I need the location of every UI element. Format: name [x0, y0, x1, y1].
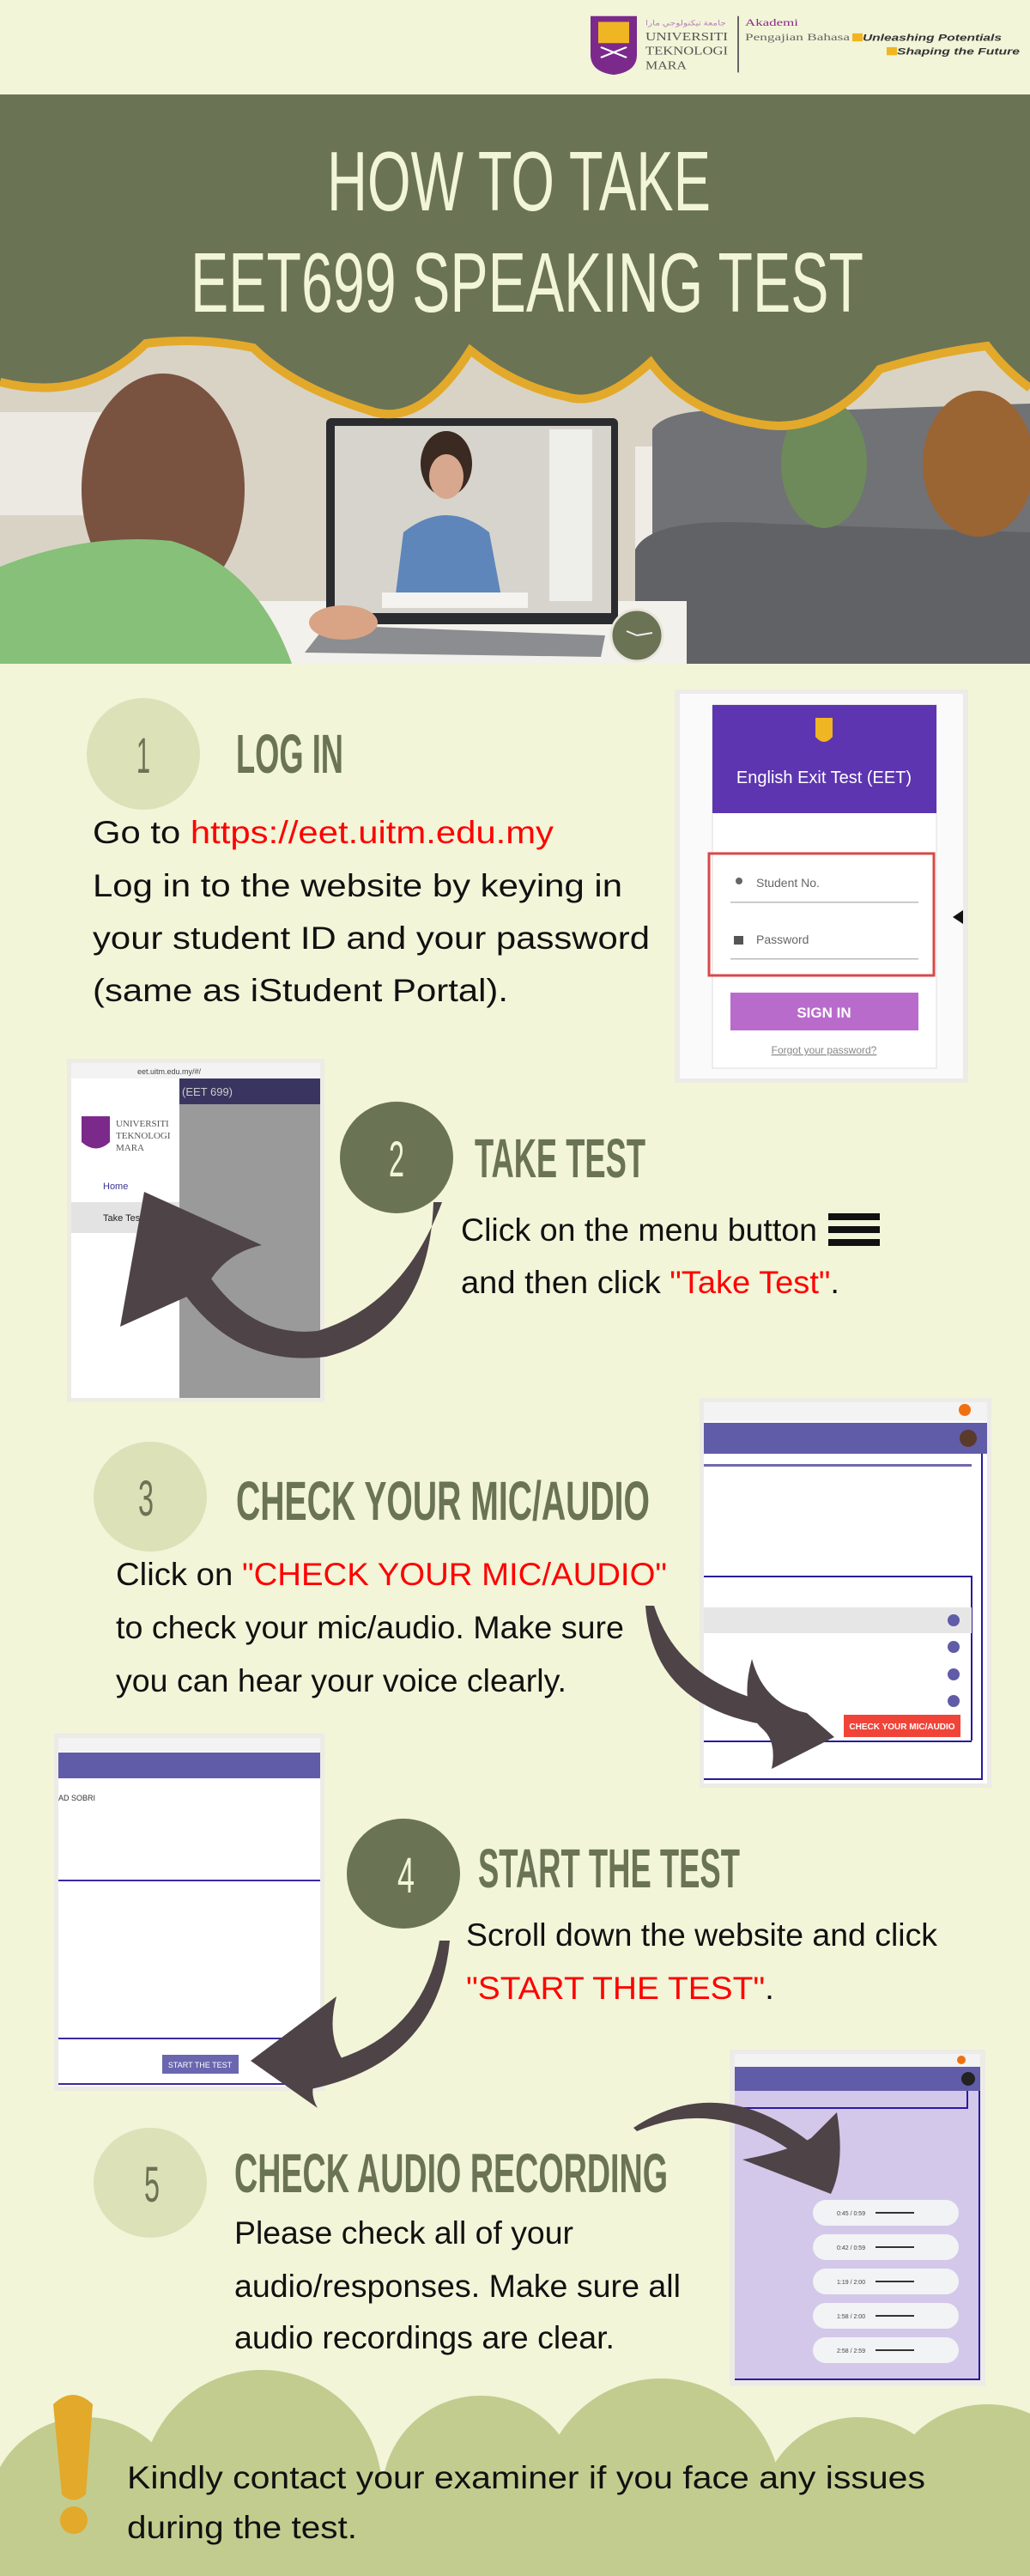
heading: log in: LOG IN — [236, 723, 343, 785]
logo header: Shaping the Future — [897, 46, 1020, 57]
note text: during the test. — [127, 2510, 357, 2545]
logo header: Pengajian Bahasa — [745, 32, 851, 43]
circle 1 — [87, 698, 200, 810]
arrow 2 — [120, 1192, 442, 1358]
arrow 4 — [251, 1941, 450, 2108]
menu screenshot: Take Test — [103, 1213, 142, 1224]
mic screenshot — [700, 1398, 991, 1788]
icon: exclamation — [53, 2395, 93, 2534]
heading: start the test: START THE TEST — [478, 1838, 740, 1899]
step 3 — [94, 1398, 991, 1788]
text 1 — [93, 815, 650, 1008]
text 4 — [466, 1917, 937, 2006]
login screenshot: Forgot your password? — [772, 1044, 877, 1056]
circle 5 — [94, 2128, 207, 2238]
logo header: UNIVERSITI — [645, 30, 728, 43]
start test screenshot — [54, 1734, 324, 2091]
heading: check your mic: CHECK YOUR MIC/AUDIO — [236, 1470, 650, 1532]
menu screenshot: MARA — [116, 1143, 144, 1153]
arrow 5 — [633, 2103, 840, 2194]
start test screenshot: START THE TEST — [168, 2061, 233, 2069]
logo header: Akademi — [745, 17, 798, 28]
menu screenshot — [67, 1059, 324, 1402]
step 1 — [87, 690, 968, 1083]
logo header: TEKNOLOGI — [645, 45, 728, 58]
logo header — [591, 16, 1020, 75]
menu screenshot: eet.uitm.edu.my/#/ — [137, 1067, 202, 1076]
text 5: audio/responses. Make sure all — [234, 2269, 681, 2304]
text 5: audio recordings are clear. — [234, 2320, 615, 2355]
menu screenshot: TEKNOLOGI — [116, 1131, 171, 1141]
audio screenshot: 2:58 / 2:59 — [837, 2348, 865, 2354]
login screenshot: Student No. — [756, 876, 820, 890]
text 4: Scroll down the website and click — [466, 1917, 937, 1953]
login screenshot — [675, 690, 968, 1083]
menu screenshot: UNIVERSITI — [116, 1119, 169, 1129]
login screenshot: Password — [756, 933, 809, 946]
audio screenshot: 1:58 / 2:00 — [837, 2314, 865, 2320]
circle 2: 2 — [389, 1132, 404, 1188]
boy — [82, 374, 245, 605]
circle 3: 3 — [138, 1471, 154, 1527]
circle 5: 5 — [144, 2157, 160, 2213]
text 2 — [461, 1212, 839, 1300]
note text: Kindly contact your examiner if you face any issues — [127, 2460, 925, 2495]
menu screenshot: (EET 699) — [182, 1085, 233, 1098]
circle 4: 4 — [397, 1848, 415, 1904]
start test screenshot: AD SOBRI — [58, 1794, 95, 1802]
step 5 — [94, 2050, 985, 2386]
text 2: Click on the menu button — [461, 1212, 817, 1248]
text 3: you can hear your voice clearly. — [116, 1663, 566, 1698]
mic screenshot: CHECK YOUR MIC/AUDIO — [849, 1722, 955, 1732]
audio screenshot: 0:45 / 0:59 — [837, 2211, 865, 2217]
heading: check audio recording: CHECK AUDIO RECORDING — [234, 2142, 668, 2204]
hero photo — [0, 343, 1030, 664]
circle 4 — [347, 1819, 460, 1929]
title — [191, 134, 863, 330]
step 4 — [54, 1734, 937, 2108]
bottom cloud — [0, 2370, 1030, 2576]
circle 1: 1 — [136, 728, 150, 784]
login screenshot: SIGN IN — [797, 1005, 851, 1021]
laptop — [305, 418, 618, 657]
clock — [611, 610, 663, 661]
text 5: Please check all of your — [234, 2215, 573, 2251]
title banner — [0, 94, 1030, 426]
logo header: MARA — [645, 59, 688, 72]
text 1: Log in to the website by keying in — [93, 868, 622, 903]
logo header: Unleashing Potentials — [863, 33, 1002, 43]
icon: menu — [828, 1213, 880, 1246]
text 1: your student ID and your password — [93, 920, 650, 956]
text 2: and then click "Take Test". — [461, 1265, 839, 1300]
heading: take test: TAKE TEST — [475, 1127, 645, 1189]
arrow 3 — [645, 1606, 834, 1769]
menu screenshot: Home — [103, 1182, 128, 1192]
text 3 — [116, 1557, 667, 1698]
audio screenshot: 0:42 / 0:59 — [837, 2245, 865, 2251]
audio screenshot: 1:19 / 2:00 — [837, 2280, 865, 2286]
text 4: "START THE TEST" . — [466, 1971, 774, 2006]
circle 3 — [94, 1442, 207, 1552]
title: HOW TO TAKE — [327, 134, 711, 228]
circle 2 — [340, 1102, 453, 1213]
text 3: Click on "CHECK YOUR MIC/AUDIO" — [116, 1557, 667, 1592]
audio screenshot — [730, 2050, 985, 2386]
text 5 — [234, 2215, 681, 2355]
text 3: to check your mic/audio. Make sure — [116, 1610, 624, 1645]
logo header: جامعة تيكنولوجي مارا — [645, 19, 726, 27]
text 1: (same as iStudent Portal). — [93, 973, 508, 1008]
text 1: Go to https://eet.uitm.edu.my — [93, 815, 554, 850]
step 2 — [67, 1059, 880, 1402]
note text — [127, 2460, 925, 2545]
login screenshot: English Exit Test (EET) — [736, 769, 912, 787]
